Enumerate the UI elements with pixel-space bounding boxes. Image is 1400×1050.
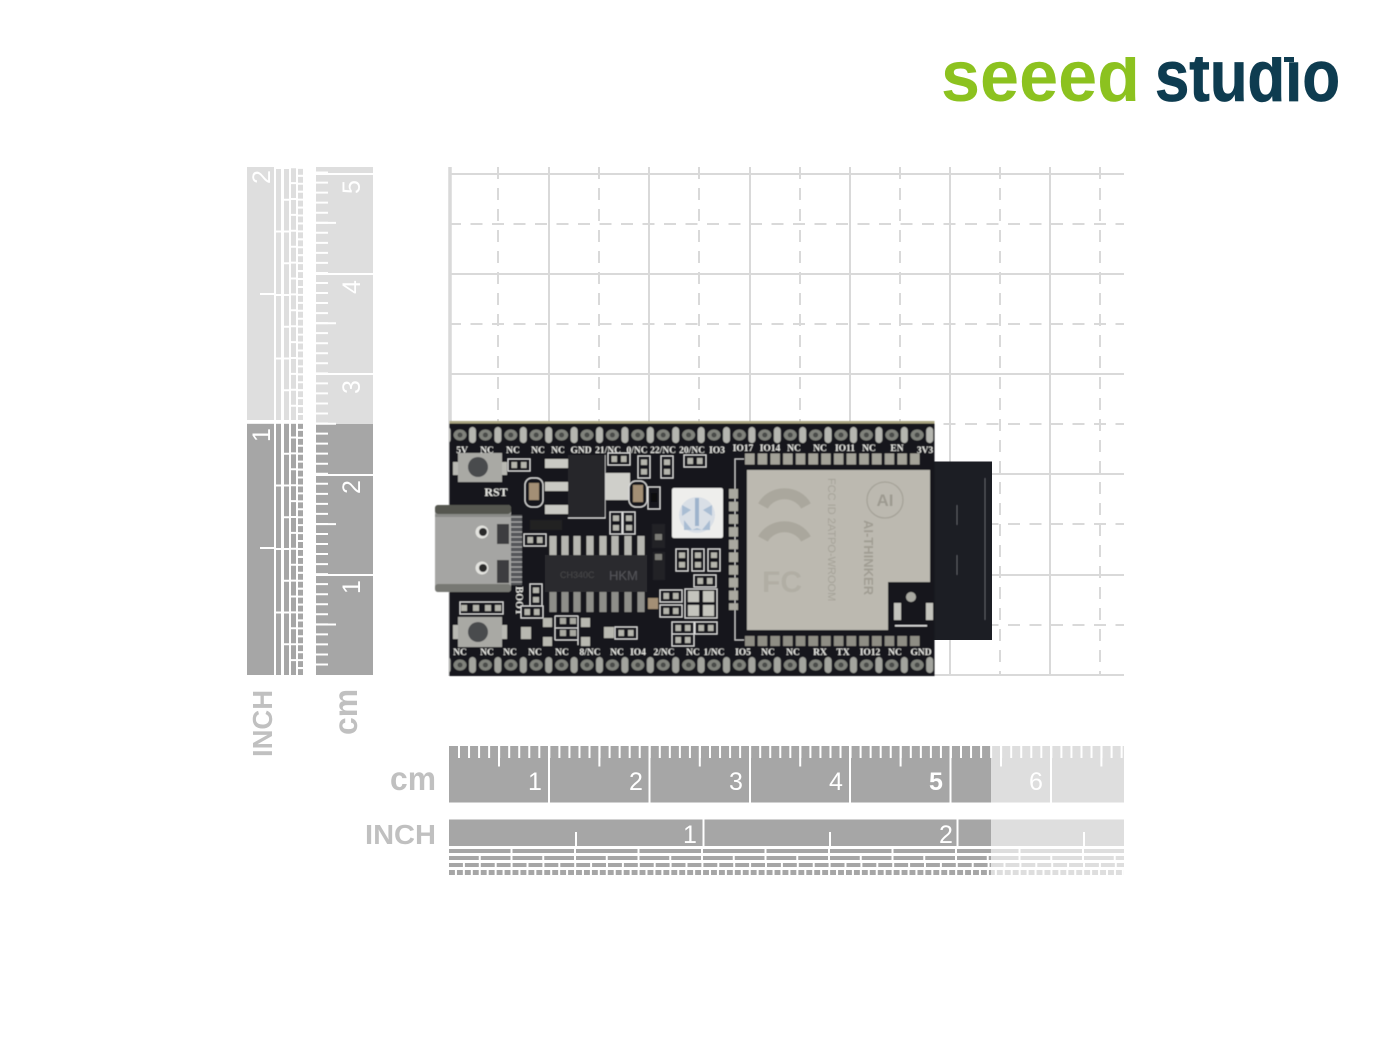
silkscreen footprints [460, 453, 720, 646]
antenna matching circuit [889, 583, 933, 630]
measurement grid [449, 167, 1124, 676]
manufacturer name: AI-THINKER [861, 520, 876, 596]
inch digits: 1 [683, 821, 697, 849]
main IC: CH340C [560, 570, 595, 580]
inch digits: 1 [248, 428, 276, 442]
top pin labels: IO17 [733, 444, 754, 454]
vertical cm ruler [316, 167, 373, 675]
vertical cm ruler: 4 [338, 280, 366, 294]
module outline and pads [734, 459, 920, 641]
top pin labels: IO14 [760, 444, 781, 454]
BOOT button: BOOT [513, 587, 524, 616]
vertical cm ruler: 3 [338, 380, 366, 394]
capacitors [525, 478, 660, 509]
FCC mark: FC [762, 566, 802, 599]
RST button [453, 453, 508, 499]
vertical inch ruler [247, 166, 304, 675]
antenna silkscreen marks [957, 478, 985, 620]
top pin labels: NC [506, 446, 520, 456]
bottom pin labels: NC [686, 648, 700, 658]
bottom pin labels: 2/NC [653, 648, 675, 658]
main IC: HKM [609, 568, 638, 583]
bright pad cluster [685, 589, 717, 618]
bottom pin labels: TX [836, 648, 850, 658]
pcb base [450, 421, 934, 676]
vertical INCH label: INCH [247, 690, 278, 757]
RGB LED [672, 488, 723, 538]
development board [435, 421, 985, 676]
top pin labels: GND [570, 446, 592, 456]
voltage regulator [545, 455, 630, 518]
top pin labels: 22/NC [650, 446, 676, 456]
bottom pin labels: IO4 [630, 648, 646, 658]
top pin labels: NC [862, 444, 876, 454]
bottom pin labels: NC [503, 648, 517, 658]
WiFi module shield [747, 470, 930, 630]
bottom pin labels: 1/NC [703, 648, 725, 658]
horizontal INCH label: INCH [365, 819, 436, 850]
horizontal cm ruler: 3 [729, 768, 743, 796]
manufacturer logo [867, 482, 903, 518]
lower resistor group [543, 618, 552, 627]
inch graduation columns [278, 167, 300, 675]
bottom pin labels: NC [555, 648, 569, 658]
vertical cm ruler: 5 [338, 180, 366, 194]
top pin labels: 5V [456, 446, 468, 456]
certification text: FCC ID 2ATPO-WROOM [825, 478, 837, 601]
top pin labels: EN [890, 444, 904, 454]
WiFi module shield: AI [876, 491, 894, 510]
bottom pin labels: 8/NC [579, 648, 601, 658]
horizontal cm ruler: 4 [829, 768, 843, 796]
top pin labels: IO3 [709, 446, 725, 456]
bottom pin labels [453, 648, 932, 658]
bottom pin labels: NC [888, 648, 902, 658]
bottom pin labels: NC [761, 648, 775, 658]
horizontal cm label: cm [390, 760, 436, 797]
top pin labels: 0/NC [626, 446, 648, 456]
USB-C connector [435, 505, 522, 592]
vertical inch ruler: 2 [248, 170, 276, 184]
fade over upper part of vertical rulers [247, 166, 374, 424]
top pin labels: 3V3 [917, 446, 933, 456]
top pin labels: NC [787, 444, 801, 454]
CE mark [763, 494, 806, 539]
horizontal cm ruler: 5 [929, 768, 943, 796]
RST button: RST [484, 485, 508, 499]
vertical cm ruler: 2 [338, 480, 366, 494]
bottom pin labels: GND [910, 648, 932, 658]
horizontal cm ruler: 2 [629, 768, 643, 796]
top pin labels: NC [551, 446, 565, 456]
vertical cm label: cm [327, 689, 364, 735]
header pins [450, 425, 934, 675]
top pin labels: NC [480, 446, 494, 456]
top pin labels: NC [813, 444, 827, 454]
top pin labels: NC [531, 446, 545, 456]
bottom pin labels: NC [453, 648, 467, 658]
top pin labels: 20/NC [679, 446, 705, 456]
logo: seeed studio: studio [1155, 37, 1340, 117]
main IC [545, 536, 647, 612]
cm digits: 1 [338, 580, 366, 594]
antenna section [925, 462, 992, 640]
logo: seeed studio: seeed [941, 37, 1140, 117]
cm digits: 1 [528, 768, 542, 796]
bottom pin labels: NC [610, 648, 624, 658]
top pin labels: IO11 [835, 444, 855, 454]
bottom pin labels: NC [786, 648, 800, 658]
bottom pin labels: RX [813, 648, 827, 658]
horizontal inch ruler [449, 819, 1124, 872]
inch graduation rows [449, 851, 1124, 872]
horizontal cm ruler: 6 [1029, 768, 1043, 796]
bottom pin labels: NC [480, 648, 494, 658]
horizontal cm ruler [449, 746, 1124, 803]
fade over right part of horizontal rulers [991, 745, 1125, 878]
top pin labels: 21/NC [595, 446, 621, 456]
logo: seeed studio [944, 57, 1338, 102]
top pin labels [456, 444, 933, 456]
bottom pin labels: NC [528, 648, 542, 658]
bottom pin labels: IO5 [735, 648, 751, 658]
horizontal inch ruler: 2 [939, 821, 953, 849]
boot header footprint [460, 602, 503, 614]
small ICs and transistors [530, 520, 665, 609]
bottom pin labels: IO12 [860, 648, 881, 658]
BOOT button [453, 587, 524, 647]
